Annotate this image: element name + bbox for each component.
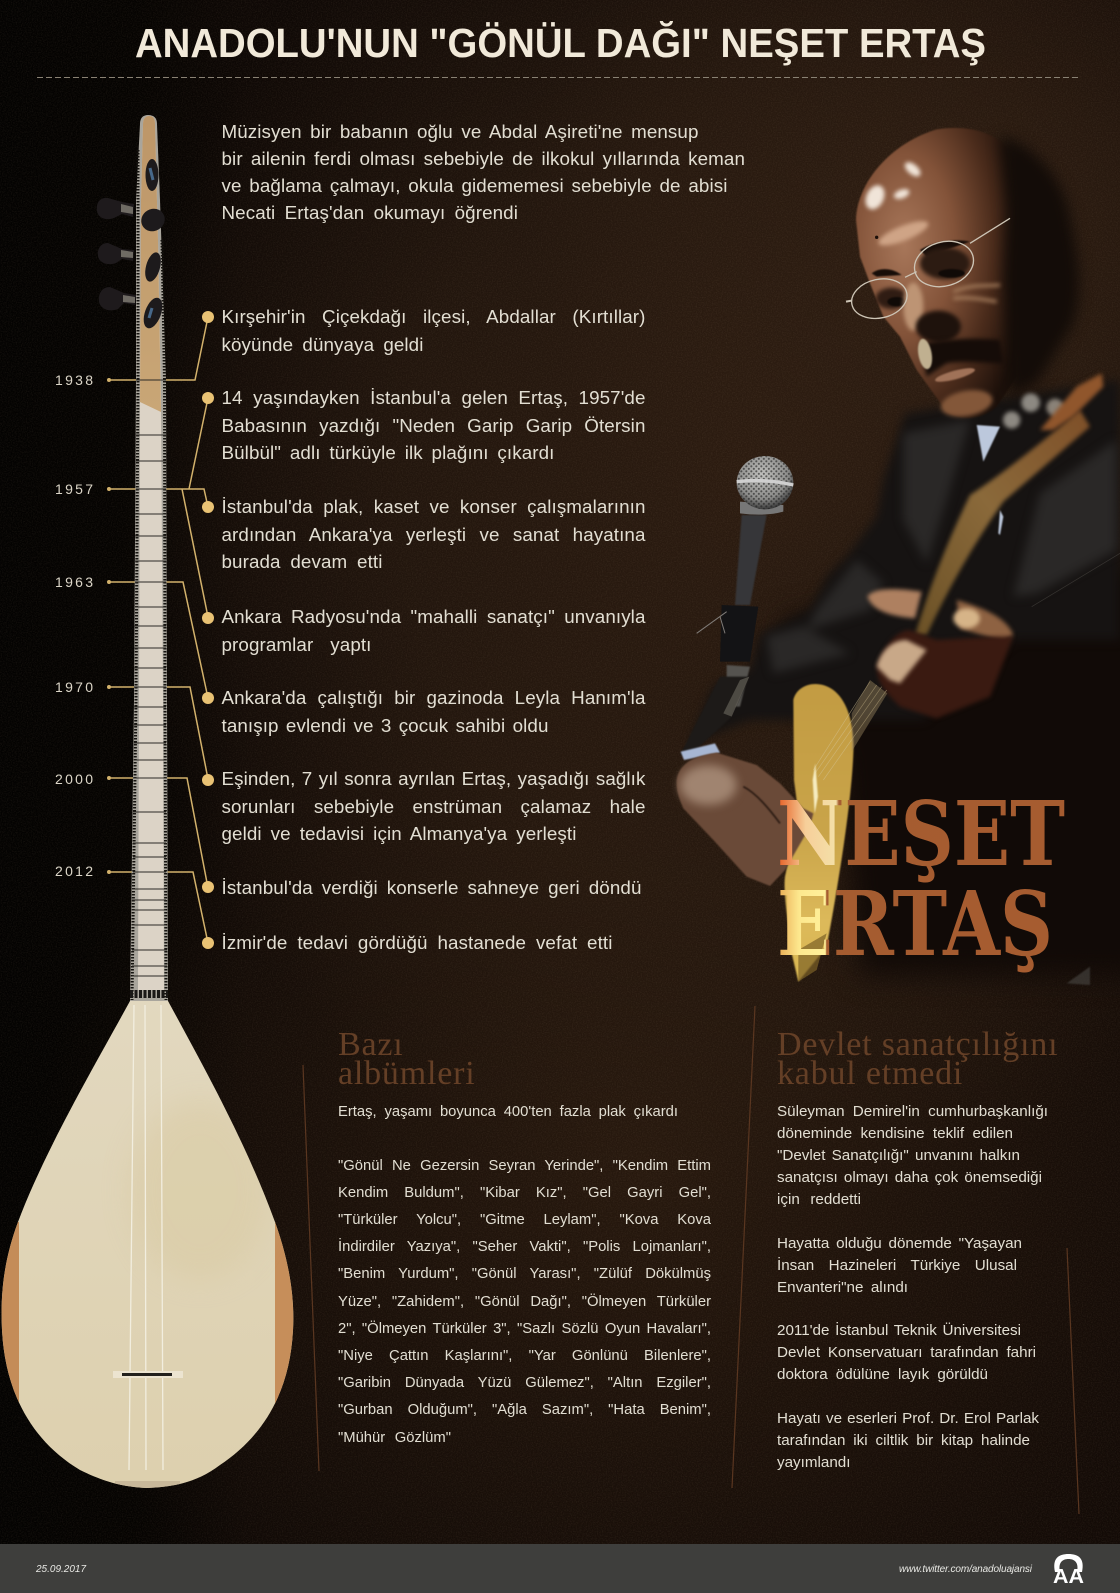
heading: Bazı albümleri: albümleri <box>338 1054 476 1092</box>
state artist paragraph 1: Süleyman Demirel'in cumhurbaşkanlığı <box>777 1102 1048 1120</box>
strings <box>813 682 887 780</box>
state artist paragraph 4: Hayatı ve eserleri Prof. Dr. Erol Parlak <box>777 1410 1039 1427</box>
year label 2000: 2000 <box>55 771 95 787</box>
hand <box>677 753 813 886</box>
heading: Bazı albümleri <box>338 1026 476 1092</box>
state artist paragraph 4 <box>777 1410 1039 1471</box>
baglama neck <box>915 410 1090 635</box>
album list: "Garibin Dünyada Yüzü Gülemez", "Altın Ezgiler", <box>338 1375 711 1391</box>
strings <box>129 1005 163 1470</box>
state artist paragraph 1: "Devlet Sanatçılığı" unvanını halkın <box>777 1146 1020 1164</box>
title divider <box>37 76 1081 78</box>
eyes in lenses <box>876 247 970 309</box>
timeline item 3 <box>222 496 646 572</box>
chin <box>939 386 994 420</box>
upper fingers <box>867 589 922 618</box>
bridge <box>113 1371 183 1378</box>
timeline item 3: İstanbul'da plak, kaset ve konser çalışmalarının <box>222 496 646 517</box>
heading: Devlet sanatçılığını kabul etmedi <box>777 1026 1058 1092</box>
timeline item 3: ardından Ankara'ya yerleşti ve sanat hayatına <box>222 524 646 545</box>
tuning pegs right <box>137 159 169 331</box>
year label 1938: 1938 <box>55 372 95 388</box>
timeline item 1: Kırşehir'in Çiçekdağı ilçesi, Abdallar (Kırtıllar) <box>222 306 646 327</box>
title: ANADOLU'NUN "GÖNÜL DAĞI" NEŞET ERTAŞ <box>135 20 986 66</box>
frets <box>132 380 167 976</box>
state artist paragraph 1: döneminde kendisine teklif edilen <box>777 1124 1013 1142</box>
jacket lit panels <box>767 420 1117 673</box>
album list: İndirdiler Yazıya", "Seher Vakti", "Polis Lojmanları", <box>338 1239 711 1255</box>
baglama head pegs <box>1003 373 1103 430</box>
intro paragraph: Müzisyen bir babanın oğlu ve Abdal Aşireti'ne mensup <box>222 120 698 142</box>
state artist paragraph 1 <box>777 1102 1048 1208</box>
album list: 2", "Ölmeyen Türküler 3", "Sazlı Sözlü Oyun Havaları", <box>338 1321 711 1337</box>
year tick dots <box>107 378 111 874</box>
state artist paragraph 3: doktora ödülüne layık görüldü <box>777 1366 988 1383</box>
heading: Devlet sanatçılığını kabul etmedi: kabul etmedi <box>777 1054 963 1092</box>
timeline item 1 <box>222 306 646 355</box>
year label 1963: 1963 <box>55 574 95 590</box>
intro paragraph: Necati Ertaş'dan okumayı öğrendi <box>222 202 518 223</box>
album list: "Benim Yurdum", "Gönül Yarası", "Zülüf Dökülmüş <box>338 1266 711 1282</box>
timeline item 2: Bülbül" adlı türküyle ilk plağını çıkardı <box>222 442 554 463</box>
year label 1970: 1970 <box>55 679 95 695</box>
baglama instrument <box>0 115 297 1490</box>
timeline item 4 <box>222 606 646 655</box>
state artist paragraph 3: 2011'de İstanbul Teknik Üniversitesi <box>777 1322 1021 1339</box>
icon: AA logo <box>1053 1554 1084 1588</box>
timeline bullets <box>202 311 214 949</box>
state artist paragraph 1: sanatçısı olmayı daha çok önemsediği <box>777 1168 1042 1186</box>
state artist paragraph 4: yayımlandı <box>777 1454 850 1471</box>
year label 1957: 1957 <box>55 481 95 497</box>
nose <box>903 283 923 331</box>
brows <box>872 240 970 277</box>
baglama body <box>785 684 854 982</box>
lap: baglama body, arm and hand <box>677 677 1090 985</box>
timeline item 6: geldi ve tedavisi için Almanya'ya yerleşti <box>222 823 576 844</box>
footer date: 25.09.2017 <box>35 1564 86 1575</box>
name: Neşet Ertaş: ERTAŞ <box>777 871 1053 976</box>
year label 2012: 2012 <box>55 863 95 879</box>
album list: "Türküler Yolcu", "Gitme Leylam", "Kova Kova <box>338 1212 711 1228</box>
shirt cuff <box>681 743 720 760</box>
tuning pegs left <box>97 198 136 310</box>
timeline item 3: burada devam etti <box>222 551 382 572</box>
timeline item 8: İzmir'de tedavi gördüğü hastanede vefat etti <box>222 932 612 953</box>
neck edges <box>130 115 168 1001</box>
timeline item 2 <box>222 387 646 463</box>
lower body shadow <box>780 560 1120 975</box>
album list: "Mühür Gözlüm" <box>338 1430 451 1446</box>
photo: Neşet Ertaş playing baglama <box>677 128 1120 985</box>
timeline item 5: Ankara'da çalıştığı bir gazinoda Leyla Hanım'la <box>222 687 646 708</box>
heading: Bazı albümleri: Bazı <box>338 1026 404 1063</box>
heading: Devlet sanatçılığını kabul etmedi: Devlet sanatçılığını <box>777 1026 1058 1063</box>
glasses <box>846 218 1010 323</box>
album list <box>338 1158 711 1446</box>
album list: Kendim Buldum", "Kibar Kız", "Gel Gayri Gel", <box>338 1185 711 1201</box>
album list: "Gurban Olduğum", "Ağla Sazım", "Hata Benim", <box>338 1402 711 1418</box>
album list: "Niye Çattın Kaşlarını", "Yar Gönlünü Bilenlere", <box>338 1348 711 1364</box>
lips <box>934 365 976 385</box>
sound hole glint <box>813 763 818 813</box>
intro paragraph: bir ailenin ferdi olması sebebiyle de ilkokul yıllarında keman <box>222 148 745 169</box>
intro paragraph: ve bağlama çalmayı, okula gidememesi sebebiyle de abisi <box>222 175 728 196</box>
sleeve <box>680 677 750 755</box>
shirt <box>977 425 1003 535</box>
state artist paragraph 4: tarafından iki ciltlik bir kitap halinde <box>777 1432 1030 1449</box>
timeline item 5: tanışıp evlendi ve 3 çocuk sahibi oldu <box>222 715 548 736</box>
neck wood <box>138 116 164 990</box>
jacket seam <box>1032 553 1120 607</box>
side wood <box>0 1100 297 1490</box>
cheek creases <box>953 285 1000 302</box>
name: Neşet Ertaş: NEŞET <box>777 781 1065 886</box>
timeline item 4: programlar yaptı <box>222 634 372 655</box>
soundboard <box>2 1001 293 1488</box>
timeline connector lines <box>109 317 208 943</box>
timeline item 5 <box>222 687 646 736</box>
album list: "Gönül Ne Gezersin Seyran Yerinde", "Kendim Ettim <box>338 1158 711 1174</box>
timeline item 1: köyünde dünyaya geldi <box>222 334 424 355</box>
state artist paragraph 3: Devlet Konservatuarı tarafından fahri <box>777 1344 1036 1361</box>
column separators <box>303 1006 1079 1514</box>
timeline item 6: sorunları sebebiyle enstrüman çalamaz hale <box>222 796 646 817</box>
timeline item 4: Ankara Radyosu'nda "mahalli sanatçı" unvanıyla <box>222 606 646 627</box>
albums summary: Ertaş, yaşamı boyunca 400'ten fazla plak çıkardı <box>338 1104 678 1120</box>
footer bar <box>0 1544 1120 1593</box>
hair and back of head <box>1000 137 1079 397</box>
timeline item 2: 14 yaşındayken İstanbul'a gelen Ertaş, 1957'de <box>222 387 646 408</box>
album list: Yüze", "Zahidem", "Gönül Dağı", "Ölmeyen Türküler <box>338 1294 711 1310</box>
jacket <box>690 380 1120 743</box>
state artist paragraph 2: Envanteri"ne alındı <box>777 1279 908 1296</box>
forehead highlights <box>862 160 923 212</box>
name: Neşet Ertaş <box>777 781 1065 976</box>
icon: AA logo: AA <box>1053 1566 1084 1588</box>
state artist paragraph 3 <box>777 1322 1036 1383</box>
head <box>846 128 1103 430</box>
state artist paragraph 2: Hayatta olduğu dönemde "Yaşayan <box>777 1235 1022 1252</box>
face shape <box>856 128 1017 418</box>
timeline item 6: Eşinden, 7 yıl sonra ayrılan Ertaş, yaşadığı sağlık <box>222 768 646 789</box>
microphone <box>697 456 793 707</box>
state artist paragraph 2: İnsan Hazineleri Türkiye Ulusal <box>777 1257 1017 1274</box>
strumming fist <box>877 630 1013 718</box>
upper torso, microphone and fretting hand <box>690 380 1120 743</box>
timeline item 6 <box>222 768 646 844</box>
state artist paragraph 1: için reddetti <box>777 1190 861 1208</box>
footer twitter address: www.twitter.com/anadoluajansi <box>899 1564 1033 1575</box>
state artist paragraph 2 <box>777 1235 1022 1296</box>
intro paragraph <box>222 120 745 223</box>
timeline item 7: İstanbul'da verdiği konserle sahneye geri döndü <box>222 877 642 898</box>
timeline item 2: Babasının yazdığı "Neden Garip Garip Ötersin <box>222 415 646 436</box>
moustache <box>920 339 1003 377</box>
